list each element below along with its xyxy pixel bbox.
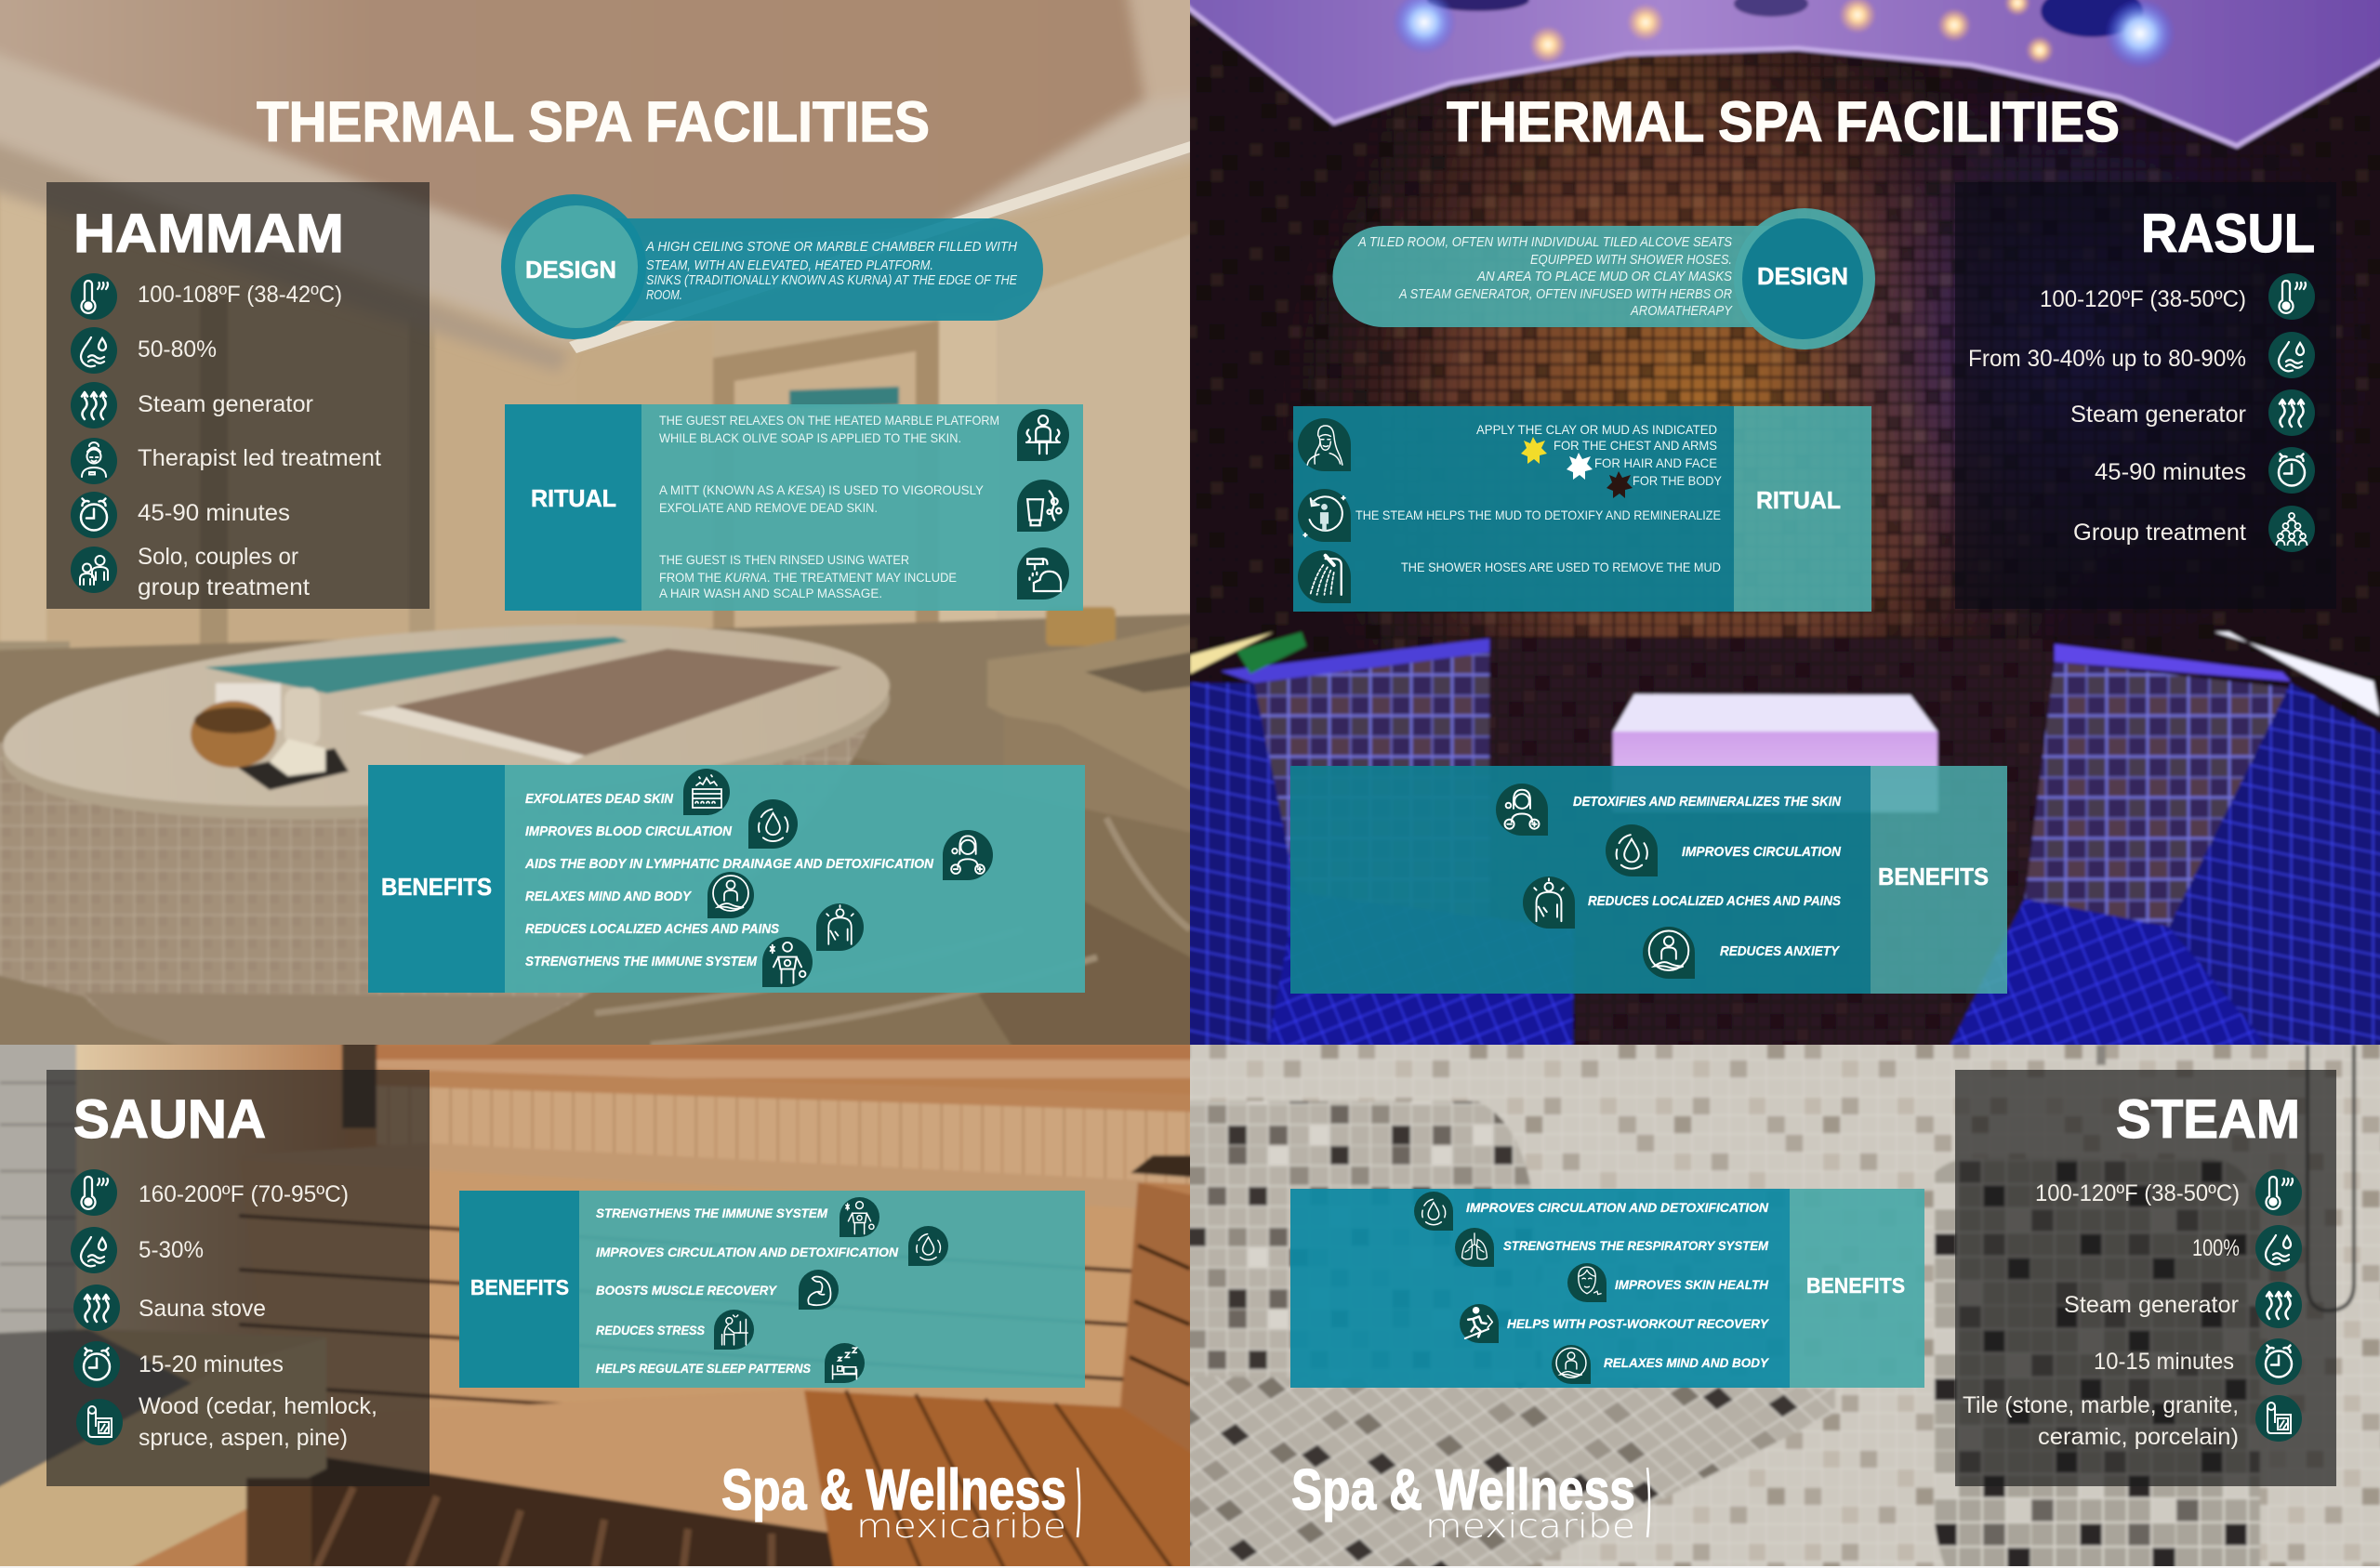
text: design description: AN AREA TO PLACE MUD OR CLAY MASKS bbox=[1476, 270, 1732, 284]
benefit: aches bbox=[525, 903, 864, 951]
benefit: sleep bbox=[596, 1343, 865, 1383]
background photo: rasul room bbox=[1171, 0, 2380, 1063]
text: design description: AROMATHERAPY bbox=[1630, 304, 1733, 319]
icon: shower bbox=[1298, 550, 1351, 603]
icon: white mud splat bbox=[1567, 453, 1593, 480]
benefit: respiratory bbox=[1455, 1228, 1769, 1267]
icon: humidity bbox=[2268, 332, 2315, 378]
benefit: blood circulation bbox=[525, 799, 798, 849]
text: ritual step 1: FOR THE CHEST AND ARMS bbox=[1554, 438, 1717, 453]
text: heat source: Sauna stove bbox=[139, 1296, 266, 1322]
icon: steam around person bbox=[1298, 489, 1351, 542]
background photo: hammam room bbox=[0, 0, 1227, 1063]
icon: material bbox=[2255, 1395, 2302, 1442]
benefit: circulation: IMPROVES CIRCULATION AND DETOXIFICATION bbox=[596, 1245, 898, 1259]
benefit: lymphatic drainage bbox=[524, 830, 993, 880]
benefit: circulation bbox=[596, 1226, 948, 1266]
text: ritual step 2 bbox=[659, 482, 985, 515]
benefit: circulation bbox=[1606, 824, 1842, 876]
text: design description: STEAM, WITH AN ELEVATED, HEATED PLATFORM. bbox=[646, 258, 933, 273]
background photo: steam room bbox=[1171, 1026, 2380, 1568]
logo: spa and wellness, steam side: mexicaribe bbox=[1425, 1508, 1635, 1546]
text: material: Tile (stone, marble, granite, bbox=[1963, 1392, 2239, 1418]
text: ritual step 3: THE SHOWER HOSES ARE USED TO REMOVE THE MUD bbox=[1401, 560, 1721, 574]
benefit: muscle bbox=[596, 1270, 839, 1310]
icon: humidity bbox=[2255, 1225, 2302, 1272]
text: ritual step 1: APPLY THE CLAY OR MUD AS INDICATED bbox=[1476, 422, 1717, 437]
icon: therapist bbox=[71, 438, 117, 484]
icon: group bbox=[2268, 506, 2315, 552]
benefit: detoxifies bbox=[1496, 784, 1841, 836]
icon: hair rinse bbox=[1017, 547, 1069, 600]
text: design description bbox=[1357, 235, 1733, 319]
icon: temperature bbox=[71, 1169, 117, 1216]
benefit: circulation: IMPROVES CIRCULATION bbox=[1682, 845, 1842, 860]
text: ritual step 1 bbox=[659, 413, 999, 445]
text: ritual step 1: FOR THE BODY bbox=[1633, 473, 1723, 488]
panel: hammam benefits bbox=[368, 765, 1085, 993]
panel: sauna facts bbox=[46, 1070, 430, 1486]
label: benefits: BENEFITS bbox=[470, 1275, 569, 1299]
text: ritual step 1: FOR HAIR AND FACE bbox=[1594, 455, 1717, 470]
benefit: immune bbox=[596, 1197, 879, 1237]
panel: steam benefits bbox=[1290, 1189, 1924, 1388]
icon: temperature bbox=[2255, 1169, 2302, 1216]
text: humidity: 5-30% bbox=[139, 1237, 204, 1263]
icon: people bbox=[71, 547, 117, 593]
logo: spa and wellness, sauna side: Spa & Wellness bbox=[721, 1458, 1066, 1522]
benefit: recovery bbox=[1460, 1304, 1770, 1343]
panel: hammam facts bbox=[46, 182, 430, 609]
section: steam bbox=[1171, 1026, 2380, 1568]
icon: heat source bbox=[2268, 389, 2315, 436]
text: material bbox=[139, 1393, 377, 1451]
label: design: DESIGN bbox=[525, 256, 616, 283]
benefit: stress: REDUCES STRESS bbox=[596, 1324, 705, 1337]
text: ritual step 1: WHILE BLACK OLIVE SOAP IS APPLIED TO THE SKIN. bbox=[659, 430, 961, 445]
benefit: immune bbox=[525, 937, 813, 987]
section: hammam bbox=[0, 0, 1227, 1063]
benefit: lymphatic drainage: AIDS THE BODY IN LYMPHATIC DRAINAGE AND DETOXIFICATION bbox=[524, 857, 934, 872]
text: heat source: Steam generator bbox=[2064, 1292, 2239, 1318]
text: humidity: 100% bbox=[2192, 1235, 2240, 1261]
label: design: DESIGN bbox=[1757, 262, 1848, 290]
logo: spa and wellness, steam side: Spa & Wellness bbox=[1291, 1458, 1635, 1522]
text: group size: group treatment bbox=[138, 574, 310, 600]
benefit: exfoliates bbox=[525, 769, 730, 815]
panel: rasul design bbox=[1333, 208, 1875, 349]
text: design description: SINKS (TRADITIONALLY KNOWN AS KURNA) AT THE EDGE OF THE bbox=[646, 273, 1017, 288]
text: group size: Solo, couples or bbox=[138, 544, 298, 570]
panel: sauna benefits bbox=[459, 1191, 1085, 1388]
text: therapist: Therapist led treatment bbox=[138, 445, 381, 471]
benefit: muscle: BOOSTS MUSCLE RECOVERY bbox=[596, 1284, 778, 1298]
text: temperature: 100-108ºF (38-42ºC) bbox=[138, 282, 342, 308]
logo: spa and wellness, sauna side bbox=[721, 1458, 1079, 1546]
benefit: stress bbox=[596, 1310, 754, 1350]
panel: rasul ritual bbox=[1293, 406, 1871, 612]
benefit: immune: STRENGTHENS THE IMMUNE SYSTEM bbox=[525, 955, 758, 969]
background photo: sauna bbox=[0, 1026, 1209, 1568]
text: design description: EQUIPPED WITH SHOWER HOSES. bbox=[1530, 253, 1732, 268]
logo: spa and wellness, steam side bbox=[1291, 1458, 1649, 1546]
benefit: relaxes bbox=[525, 872, 754, 918]
section: rasul bbox=[1171, 0, 2380, 1063]
text: ritual step 1: THE GUEST RELAXES ON THE HEATED MARBLE PLATFORM bbox=[659, 413, 999, 428]
benefit: circulation: IMPROVES CIRCULATION AND DETOXIFICATION bbox=[1466, 1201, 1768, 1215]
label: benefits: BENEFITS bbox=[381, 873, 492, 901]
benefit: immune: STRENGTHENS THE IMMUNE SYSTEM bbox=[596, 1206, 828, 1220]
icon: humidity bbox=[71, 1227, 117, 1273]
benefit: skin bbox=[1567, 1263, 1768, 1302]
logo: spa and wellness, sauna side: mexicaribe bbox=[856, 1508, 1066, 1546]
text: ritual step 3 bbox=[659, 552, 957, 600]
text: material bbox=[1963, 1392, 2239, 1450]
heading: rasul: RASUL bbox=[2141, 204, 2315, 264]
icon: heat source bbox=[2255, 1282, 2302, 1328]
benefit: aches: REDUCES LOCALIZED ACHES AND PAINS bbox=[1588, 894, 1841, 909]
benefit: recovery: HELPS WITH POST-WORKOUT RECOVERY bbox=[1507, 1317, 1770, 1331]
text: heat source: Steam generator bbox=[138, 391, 313, 417]
text: temperature: 160-200ºF (70-95ºC) bbox=[139, 1181, 349, 1207]
benefit: circulation bbox=[1414, 1192, 1768, 1231]
icon: duration bbox=[73, 1341, 120, 1388]
icon: temperature bbox=[71, 273, 117, 320]
text: ritual step 3: A HAIR WASH AND SCALP MASSAGE. bbox=[659, 586, 882, 600]
panel: hammam design bbox=[501, 194, 1043, 339]
text: temperature: 100-120ºF (38-50ºC) bbox=[2035, 1180, 2240, 1206]
text: duration: 45-90 minutes bbox=[138, 500, 290, 526]
text: group: Group treatment bbox=[2073, 520, 2246, 546]
text: duration: 15-20 minutes bbox=[139, 1351, 284, 1377]
text: ritual step 2: THE STEAM HELPS THE MUD TO DETOXIFY AND REMINERALIZE bbox=[1355, 507, 1721, 522]
text: duration: 10-15 minutes bbox=[2094, 1349, 2234, 1375]
text: humidity: From 30-40% up to 80-90% bbox=[1968, 346, 2246, 372]
text: material: ceramic, porcelain) bbox=[2038, 1424, 2239, 1450]
text: temperature: 100-120ºF (38-50ºC) bbox=[2040, 286, 2246, 312]
text: ritual step 2: EXFOLIATE AND REMOVE DEAD SKIN. bbox=[659, 500, 878, 515]
section: sauna bbox=[0, 1026, 1209, 1568]
heading: steam: STEAM bbox=[2116, 1089, 2300, 1150]
panel: rasul benefits bbox=[1290, 766, 2007, 994]
text: design description bbox=[645, 240, 1017, 303]
benefit: respiratory: STRENGTHENS THE RESPIRATORY SYSTEM bbox=[1503, 1239, 1769, 1253]
benefit: anxiety bbox=[1643, 927, 1840, 979]
icon: heat source bbox=[73, 1285, 120, 1331]
icon: exfoliation bbox=[1017, 480, 1069, 532]
benefit: aches: REDUCES LOCALIZED ACHES AND PAINS bbox=[525, 922, 779, 937]
text: ritual step 3: THE GUEST IS THEN RINSED USING WATER bbox=[659, 552, 909, 567]
icon: applying clay bbox=[1298, 418, 1351, 471]
panel: hammam ritual bbox=[505, 404, 1083, 611]
text: duration: 45-90 minutes bbox=[2095, 459, 2246, 485]
benefit: relaxes: RELAXES MIND AND BODY bbox=[525, 889, 692, 904]
title: rasul side: THERMAL SPA FACILITIES bbox=[1447, 90, 2120, 153]
label: benefits: BENEFITS bbox=[1806, 1273, 1905, 1298]
icon: temperature bbox=[2268, 273, 2315, 320]
icon: yellow mud splat bbox=[1521, 437, 1547, 464]
benefit: blood circulation: IMPROVES BLOOD CIRCULATION bbox=[525, 824, 732, 839]
benefit: exfoliates: EXFOLIATES DEAD SKIN bbox=[525, 792, 673, 807]
text: design description: A STEAM GENERATOR, OFTEN INFUSED WITH HERBS OR bbox=[1398, 287, 1732, 302]
text: heat source: Steam generator bbox=[2070, 402, 2246, 428]
text: material: Wood (cedar, hemlock, bbox=[139, 1393, 377, 1419]
icon: heat source bbox=[71, 382, 117, 428]
benefit: detoxifies: DETOXIFIES AND REMINERALIZES THE SKIN bbox=[1573, 795, 1841, 810]
panel: rasul facts bbox=[1955, 182, 2336, 609]
title: hammam side: THERMAL SPA FACILITIES bbox=[257, 90, 930, 153]
text: material: spruce, aspen, pine) bbox=[139, 1425, 348, 1451]
icon: material bbox=[76, 1399, 123, 1445]
benefit: aches bbox=[1523, 876, 1841, 929]
icon: guest on platform bbox=[1017, 409, 1069, 461]
panel: steam facts bbox=[1955, 1070, 2336, 1486]
text: ritual step 3: FROM THE KURNA. THE TREATMENT MAY INCLUDE bbox=[659, 570, 957, 585]
benefit: sleep: HELPS REGULATE SLEEP PATTERNS bbox=[596, 1362, 811, 1376]
icon: black mud splat bbox=[1606, 471, 1633, 498]
icon: duration bbox=[71, 492, 117, 538]
text: design description: A TILED ROOM, OFTEN WITH INDIVIDUAL TILED ALCOVE SEATS bbox=[1357, 235, 1732, 250]
benefit: relaxes: RELAXES MIND AND BODY bbox=[1604, 1356, 1770, 1370]
label: ritual: RITUAL bbox=[531, 484, 616, 512]
text: humidity: 50-80% bbox=[138, 336, 217, 362]
benefit: anxiety: REDUCES ANXIETY bbox=[1720, 944, 1840, 959]
label: ritual: RITUAL bbox=[1756, 486, 1841, 514]
text: ritual step 1 bbox=[1476, 422, 1723, 488]
icon: duration bbox=[2268, 447, 2315, 494]
text: design description: ROOM. bbox=[646, 288, 682, 303]
label: benefits: BENEFITS bbox=[1878, 863, 1989, 890]
heading: hammam: HAMMAM bbox=[73, 204, 344, 264]
benefit: relaxes bbox=[1552, 1345, 1770, 1384]
benefit: skin: IMPROVES SKIN HEALTH bbox=[1615, 1278, 1768, 1292]
heading: sauna: SAUNA bbox=[73, 1089, 266, 1150]
icon: humidity bbox=[71, 327, 117, 374]
icon: duration bbox=[2255, 1338, 2302, 1385]
text: group size bbox=[138, 544, 310, 600]
text: design description: A HIGH CEILING STONE OR MARBLE CHAMBER FILLED WITH bbox=[645, 240, 1017, 255]
text: ritual step 2: A MITT (KNOWN AS A KESA) IS USED TO VIGOROUSLY bbox=[659, 482, 985, 497]
